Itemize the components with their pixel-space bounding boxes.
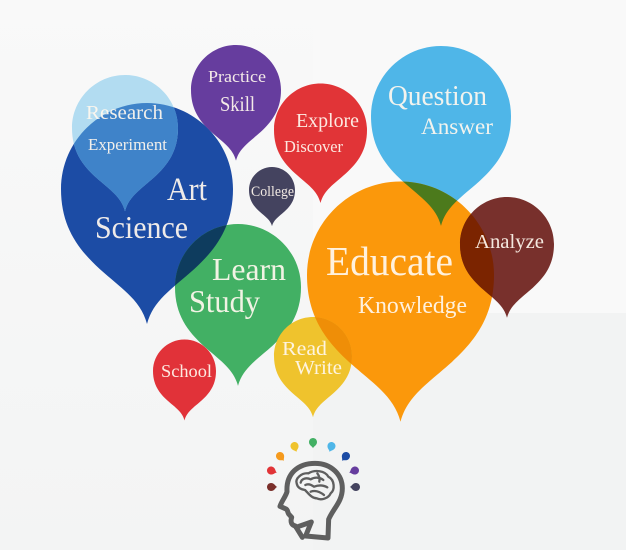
bubble: Science bbox=[61, 103, 233, 324]
bubble: Practice bbox=[191, 45, 281, 161]
label: Write: Write bbox=[295, 357, 342, 379]
label: Explore: Explore bbox=[296, 110, 359, 132]
overlap: Analyze and Educate bbox=[460, 214, 494, 297]
label: Answer: Answer bbox=[421, 114, 493, 139]
bubble: Question bbox=[371, 46, 511, 226]
label: Science: Science bbox=[95, 209, 188, 245]
overlap: Learn and Science bbox=[175, 225, 227, 286]
label: Art: Art bbox=[167, 172, 207, 208]
label: Knowledge: Knowledge bbox=[358, 293, 467, 319]
bubble: Learn bbox=[175, 224, 301, 386]
label: Experiment: Experiment bbox=[88, 135, 167, 154]
overlap: Question and Educate bbox=[403, 182, 457, 226]
label: Read: Read bbox=[282, 338, 327, 360]
label: College: College bbox=[251, 184, 294, 200]
label: School: School bbox=[161, 361, 212, 381]
bubble: Explore bbox=[274, 84, 367, 203]
label: Analyze: Analyze bbox=[475, 231, 544, 253]
overlap: Research and Science bbox=[74, 103, 178, 210]
label: Practice: Practice bbox=[208, 67, 266, 86]
bubble: Analyze bbox=[460, 197, 554, 318]
bubble: Research bbox=[72, 75, 178, 211]
bubble: Educate bbox=[307, 182, 494, 422]
label: Educate: Educate bbox=[326, 238, 453, 284]
overlap: Read and Educate bbox=[315, 317, 352, 364]
label: Research: Research bbox=[86, 102, 163, 124]
label: Study: Study bbox=[189, 283, 260, 319]
bubble: Read bbox=[274, 317, 352, 417]
icon: radiating colored drops bbox=[266, 438, 360, 491]
bubble: School bbox=[153, 340, 216, 420]
label: Learn: Learn bbox=[212, 251, 286, 287]
label: Skill: Skill bbox=[220, 92, 255, 116]
label: Question: Question bbox=[388, 81, 487, 112]
bubble: College bbox=[249, 167, 295, 226]
icon: head with brain bbox=[280, 463, 342, 538]
label: Discover: Discover bbox=[284, 137, 343, 156]
